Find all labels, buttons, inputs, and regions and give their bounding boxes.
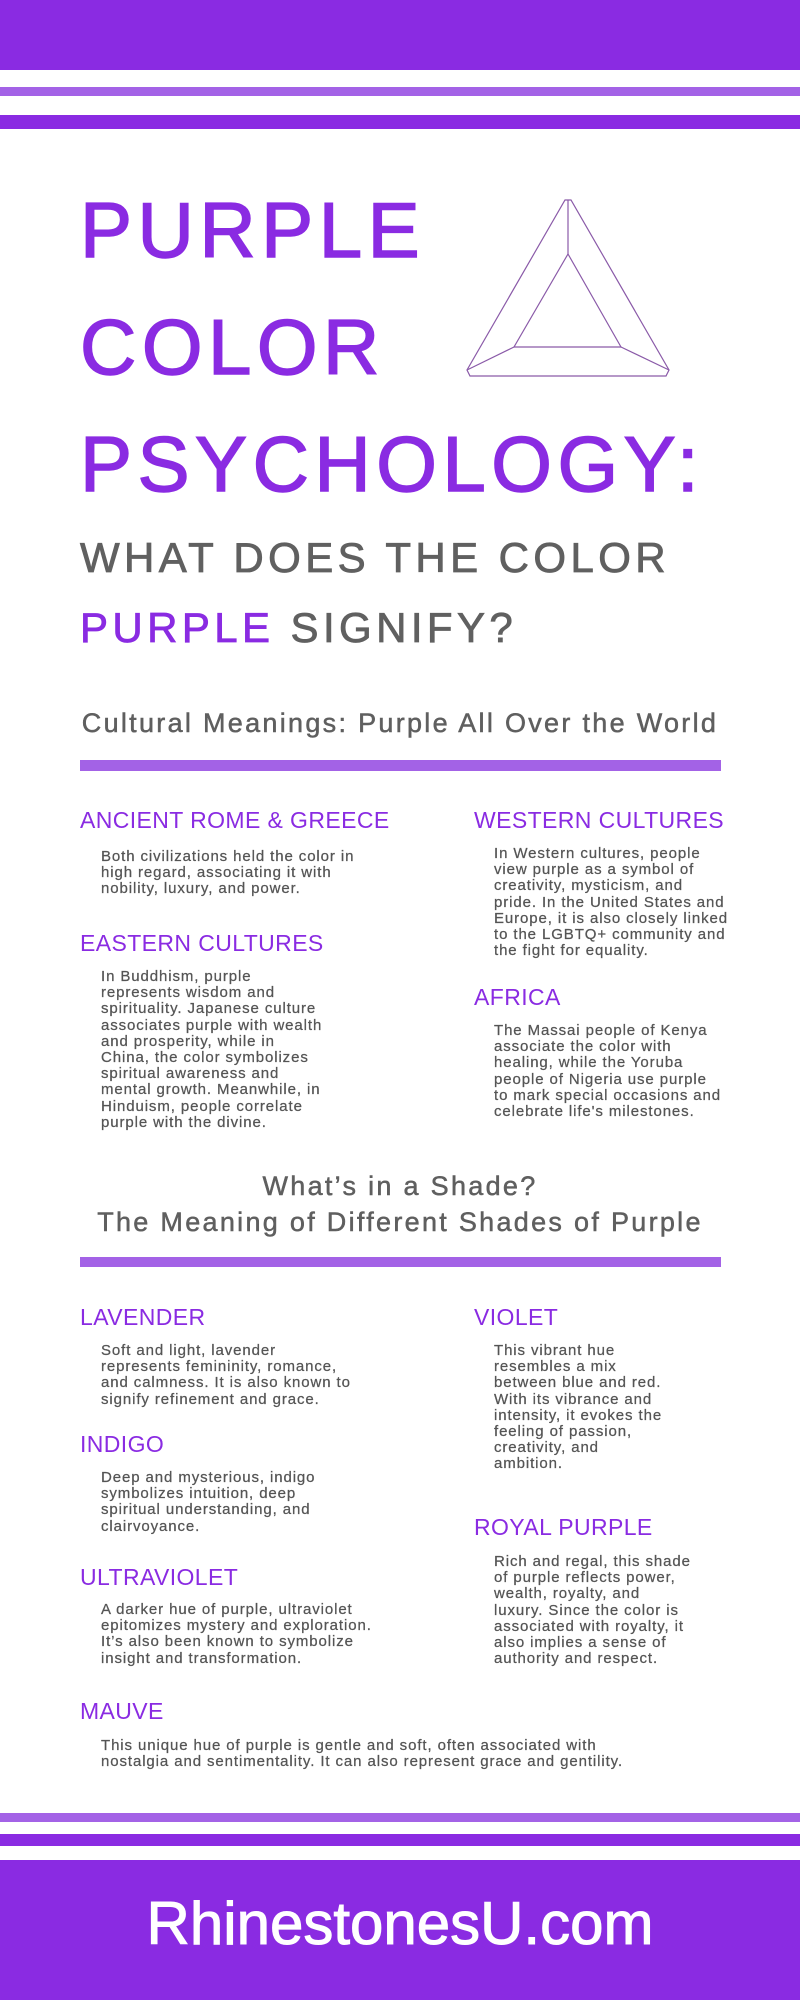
panel: eastern cultures: China, the color symbolizes [101,1049,309,1066]
title: PURPLE [80,186,425,274]
panel: royal purple: of purple reflects power, [494,1569,676,1586]
footer text: RhinestonesU.com [147,1890,653,1957]
panel: ancient rome [80,807,390,897]
panel: africa [474,984,721,1120]
panel: eastern cultures: In Buddhism, purple [101,968,252,985]
panel: violet: feeling of passion, [494,1423,632,1440]
panel: western cultures: creativity, mysticism, and [494,877,683,894]
panel: western cultures: view purple as a symbol of [494,861,694,878]
panel: violet [474,1304,662,1472]
panel: africa: celebrate life's milestones. [494,1103,695,1120]
panel: eastern cultures: Hinduism, people correlate [101,1098,303,1115]
panel: ultraviolet: ULTRAVIOLET [80,1564,238,1590]
panel: indigo: symbolizes intuition, deep [101,1485,296,1502]
panel: ultraviolet [80,1564,372,1667]
panel: lavender: and calmness. It is also known to [101,1374,351,1391]
panel: eastern cultures: associates purple with wealth [101,1017,322,1034]
panel: ultraviolet: A darker hue of purple, ultraviolet [101,1601,353,1618]
panel: violet: resembles a mix [494,1358,617,1375]
panel: eastern cultures [80,930,324,1131]
panel: violet: This vibrant hue [494,1342,615,1359]
panel: eastern cultures: and prosperity, while in [101,1033,275,1050]
panel: mauve: This unique hue of purple is gentle and soft, often associated with [101,1737,597,1754]
panel: lavender: Soft and light, lavender [101,1342,276,1359]
panel: eastern cultures: spirituality. Japanese culture [101,1000,316,1017]
panel: eastern cultures: EASTERN CULTURES [80,930,324,956]
panel: eastern cultures: mental growth. Meanwhile, in [101,1081,320,1098]
panel: africa: healing, while the Yoruba [494,1054,683,1071]
panel: indigo [80,1431,315,1535]
panel: ultraviolet: insight and transformation. [101,1650,302,1667]
panel: indigo: INDIGO [80,1431,164,1457]
panel: ancient rome: Both civilizations held the color in [101,848,354,865]
panel: ultraviolet: It’s also been known to symbolize [101,1633,354,1650]
panel: mauve [80,1698,623,1770]
panel: mauve: MAUVE [80,1698,164,1724]
panel: africa: The Massai people of Kenya [494,1022,708,1039]
panel: ancient rome: ANCIENT ROME & GREECE [80,807,390,833]
icon: triangle gem [466,199,670,377]
panel: eastern cultures: represents wisdom and [101,984,275,1001]
section heading: cultural meanings: Cultural Meanings: Purple All Over the World [82,708,718,738]
panel: royal purple: also implies a sense of [494,1634,666,1651]
footer [0,1860,800,2000]
subtitle: WHAT DOES THE COLOR [80,534,670,581]
top banner [0,0,800,70]
panel: ultraviolet: epitomizes mystery and exploration. [101,1617,372,1634]
title: COLOR [80,303,385,391]
panel: violet: With its vibrance and [494,1391,652,1408]
panel: royal purple: luxury. Since the color is [494,1602,679,1619]
panel: violet: intensity, it evokes the [494,1407,662,1424]
panel: africa: associate the color with [494,1038,672,1055]
panel: lavender: signify refinement and grace. [101,1391,320,1408]
panel: lavender: represents femininity, romance, [101,1358,337,1375]
title: PSYCHOLOGY: [80,420,704,508]
bottom stripes [0,1813,800,1822]
panel: indigo: Deep and mysterious, indigo [101,1469,315,1486]
section heading: shades: What’s in a Shade? [262,1171,538,1201]
panel: royal purple: Rich and regal, this shade [494,1553,691,1570]
panel: indigo: clairvoyance. [101,1518,200,1535]
panel: africa: AFRICA [474,984,561,1010]
title [80,186,704,651]
panel: royal purple: authority and respect. [494,1650,658,1667]
panel: mauve: nostalgia and sentimentality. It can also represent grace and gentility. [101,1753,623,1770]
panel: western cultures: pride. In the United States and [494,894,725,911]
panel: violet: creativity, and [494,1439,599,1456]
panel: lavender [80,1304,351,1408]
panel: western cultures: the fight for equality. [494,942,649,959]
panel: eastern cultures: purple with the divine. [101,1114,267,1131]
panel: royal purple: wealth, royalty, and [494,1585,640,1602]
panel: western cultures: Europe, it is also closely linked [494,910,728,927]
panel: violet: ambition. [494,1455,563,1472]
panel: africa: to mark special occasions and [494,1087,721,1104]
panel: royal purple: ROYAL PURPLE [474,1514,653,1540]
panel: western cultures: In Western cultures, people [494,845,701,862]
title: PURPLE SIGNIFY? [80,604,517,651]
panel: violet: VIOLET [474,1304,558,1330]
panel: western cultures [474,807,728,959]
panel: western cultures: WESTERN CULTURES [474,807,724,833]
section heading: shades: The Meaning of Different Shades of Purple [97,1207,703,1237]
panel: africa: people of Nigeria use purple [494,1071,707,1088]
panel: ancient rome: high regard, associating it with [101,864,332,881]
panel: eastern cultures: spiritual awareness and [101,1065,279,1082]
panel: western cultures: to the LGBTQ+ community and [494,926,725,943]
panel: violet: between blue and red. [494,1374,661,1391]
panel: lavender: LAVENDER [80,1304,205,1330]
section heading: shades [97,1171,703,1237]
panel: indigo: spiritual understanding, and [101,1501,310,1518]
panel: royal purple: associated with royalty, it [494,1618,684,1635]
panel: ancient rome: nobility, luxury, and power. [101,880,301,897]
panel: royal purple [474,1514,691,1667]
